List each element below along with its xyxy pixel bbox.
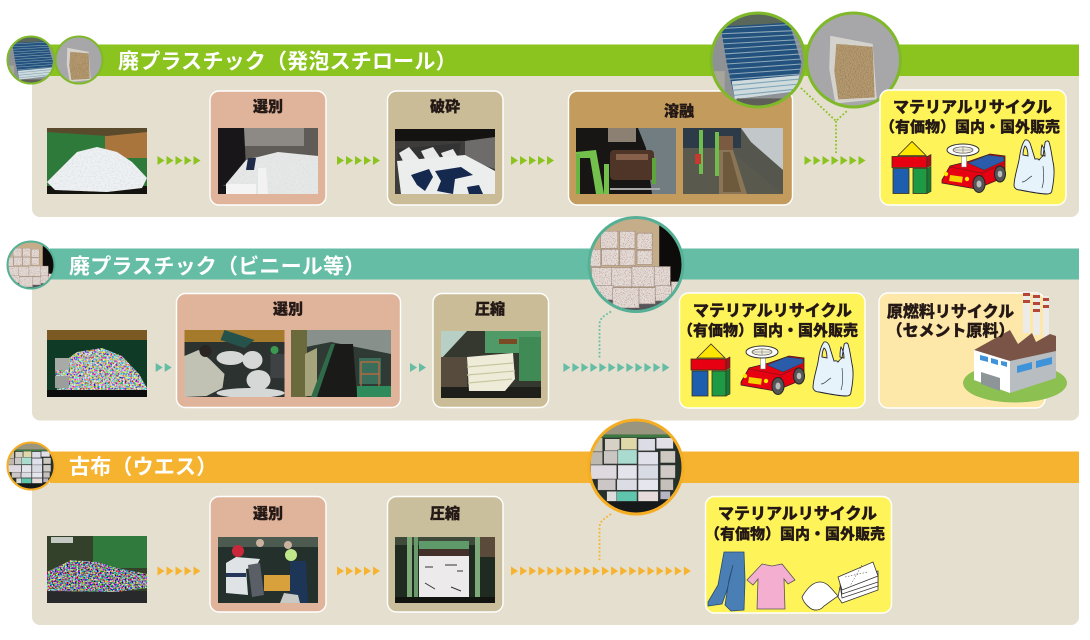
step label: 選別 (253, 98, 283, 116)
photo: cloth press (395, 537, 495, 603)
photo: melter (576, 128, 676, 194)
dotted connector: vinyl (600, 312, 611, 358)
step label: 圧縮 (430, 505, 460, 523)
icon: folded cloth stack (838, 562, 878, 603)
photo circle: large pellet (806, 12, 901, 107)
step: melting (568, 91, 792, 205)
icon: small bales photo (8, 242, 54, 288)
result: material recycling cloth (705, 496, 892, 613)
header bar: styrofoam (50, 44, 1079, 76)
icon: plastic bag (813, 342, 853, 396)
ring: small stack (8, 36, 54, 84)
title: styrofoam: 廃プラスチック（発泡スチロール） (118, 50, 457, 74)
result subheading: （有価物）国内・国外販売 (678, 322, 858, 340)
result: material recycling styrofoam (880, 90, 1066, 205)
step: crushing (388, 91, 503, 205)
photo: cloth pile (47, 536, 147, 603)
icon: toy blocks (691, 344, 730, 396)
step box (176, 294, 400, 408)
result heading: マテリアルリサイクル (893, 98, 1052, 116)
icon: small cloth bales photo (8, 444, 54, 488)
result box (879, 293, 1045, 408)
step box (568, 91, 792, 205)
step: compressing vinyl (433, 294, 548, 408)
ring: large bales (589, 218, 683, 312)
step box (388, 496, 503, 612)
step box (210, 91, 326, 205)
arrows: vinyl 1 (156, 363, 172, 372)
photo: sorting foam (218, 128, 318, 194)
icon: toy blocks (892, 142, 931, 194)
photo circle: large cloth bales (588, 420, 683, 514)
step label: 圧縮 (475, 300, 505, 318)
icon: jeans (708, 552, 745, 611)
photo: workers sorting (184, 330, 284, 397)
step box (210, 496, 326, 612)
result: fuel recycling (879, 291, 1067, 408)
icon: small stack photo (8, 38, 54, 82)
arrows: vinyl 3 (563, 363, 669, 372)
icon: rolled towel (802, 582, 838, 610)
header bar: vinyl (50, 248, 1079, 280)
icon: toy car (942, 144, 1006, 192)
photo: foam pile (47, 128, 147, 194)
result box (706, 496, 892, 613)
arrows: cloth 1 (158, 566, 200, 576)
step: compressing cloth (388, 496, 503, 612)
dotted connector: cloth (600, 514, 611, 562)
panel: vinyl background (32, 280, 1079, 420)
step label: 選別 (273, 301, 303, 318)
step label: 溶融 (664, 102, 694, 120)
icon: t-shirt (747, 564, 795, 609)
header bar: cloth (50, 452, 1079, 483)
arrows: cloth 3 (511, 566, 691, 576)
icon: toy car (741, 346, 804, 394)
icon: plastic bag (1014, 140, 1054, 194)
photo: crusher (395, 129, 495, 194)
arrows: cloth 2 (337, 566, 380, 576)
arrows: vinyl 2 (410, 363, 426, 372)
step: sorting cloth (210, 496, 326, 612)
title: cloth: 古布（ウエス） (69, 456, 217, 479)
photo circle: large stack (710, 12, 805, 107)
icon: small pellet photo (56, 38, 102, 82)
result heading: 原燃料リサイクル (887, 302, 1014, 321)
title: vinyl: 廃プラスチック（ビニール等） (69, 256, 365, 278)
photo: conveyor (291, 330, 391, 397)
dotted connector: styrofoam (801, 88, 848, 153)
photo: melt line (683, 128, 783, 194)
photo circle: large bales (588, 217, 683, 312)
arrows: styrofoam 3 (511, 156, 554, 165)
result subheading: （有価物）国内・国外販売 (705, 525, 885, 543)
step label: 破砕 (430, 98, 460, 116)
panel: styrofoam background (32, 76, 1079, 217)
step label: 選別 (253, 506, 283, 523)
section: waste plastic vinyl (7, 217, 1079, 420)
ring: large cloth bales (589, 420, 683, 514)
result subheading: （有価物）国内・国外販売 (880, 118, 1060, 136)
result box (680, 293, 865, 408)
ring: small pellet (56, 36, 102, 84)
result subheading: （セメント原料） (887, 321, 1014, 340)
ring: small bales (8, 242, 54, 288)
result heading: マテリアルリサイクル (718, 505, 877, 523)
photo: plastic pile (47, 330, 147, 397)
section: used cloth (7, 420, 1079, 625)
ring: large stack (711, 13, 805, 107)
illustration: factory (963, 291, 1067, 402)
arrows: styrofoam 2 (337, 156, 380, 165)
photo: workers cloth (218, 537, 318, 603)
result: material recycling vinyl (678, 293, 865, 408)
step box (433, 294, 548, 408)
photo: baler (441, 331, 541, 398)
ring: large pellet (806, 13, 900, 107)
section: waste plastic styrofoam (7, 12, 1079, 217)
step: sorting styrofoam (210, 91, 326, 205)
step box (388, 91, 503, 205)
result heading: マテリアルリサイクル (693, 302, 852, 320)
arrows: styrofoam 1 (158, 156, 200, 165)
result box (880, 90, 1066, 205)
panel: cloth background (32, 483, 1079, 625)
arrows: styrofoam 4 (804, 156, 866, 165)
ring: small cloth bales (8, 442, 54, 490)
step: sorting vinyl (176, 294, 400, 408)
